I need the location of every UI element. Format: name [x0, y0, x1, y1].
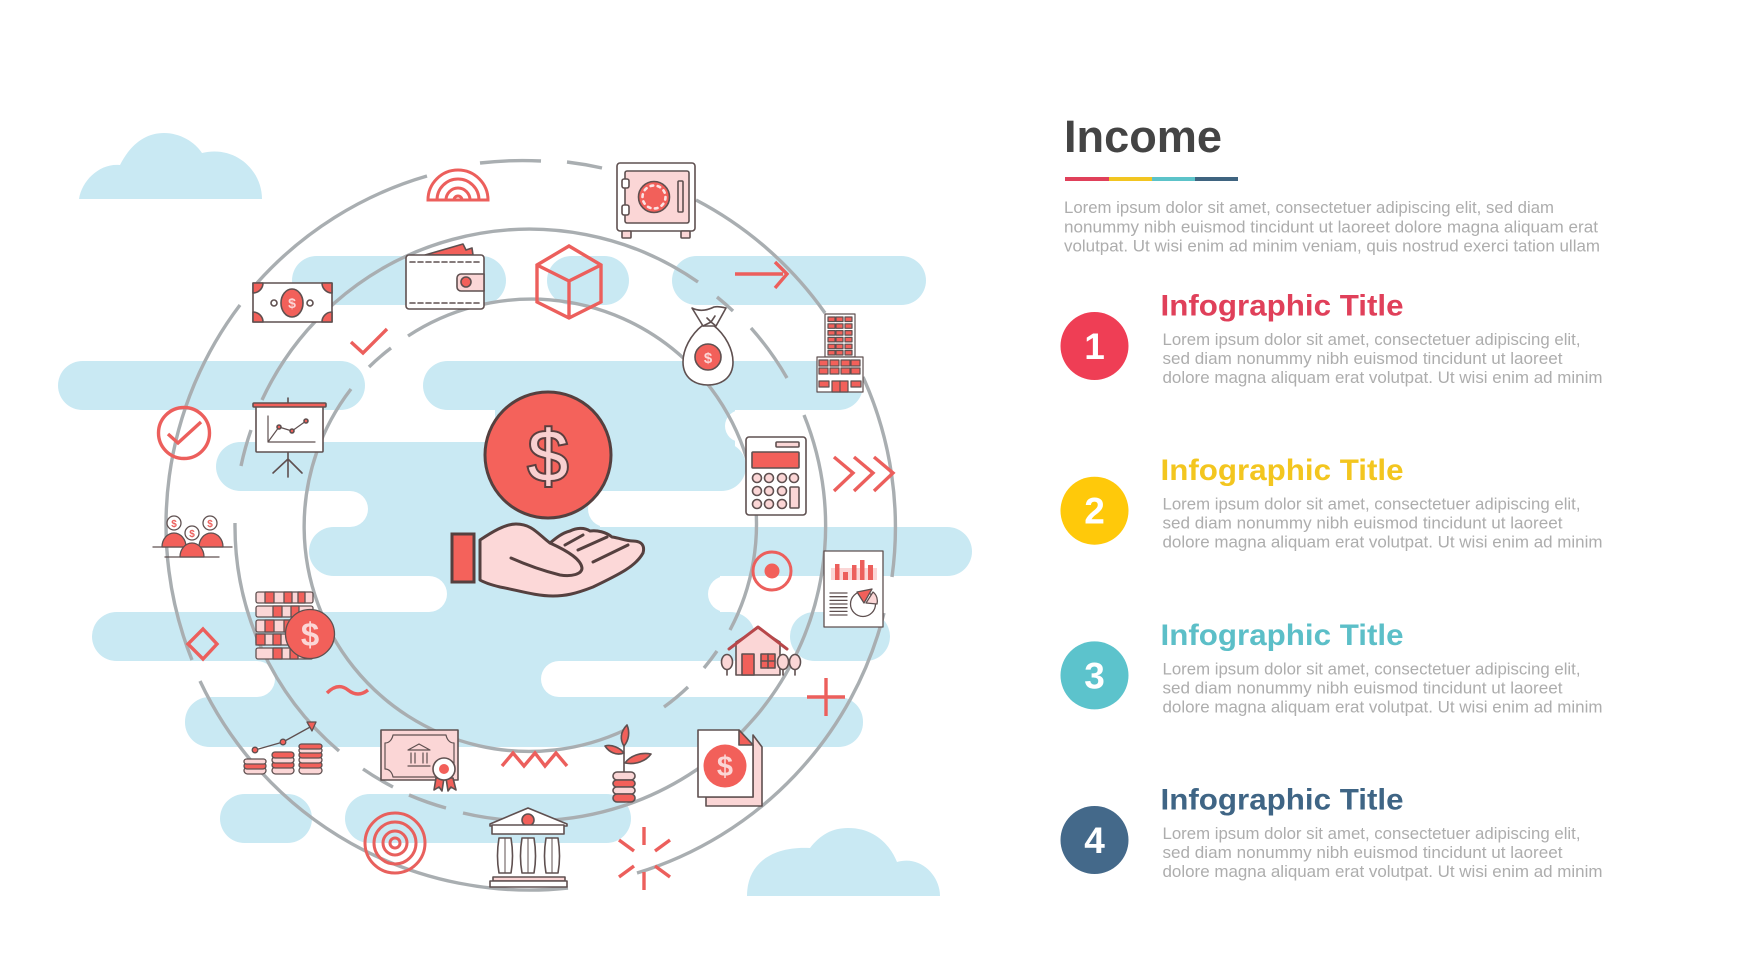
icon: right arrow	[735, 262, 787, 288]
background: clouds and blue bands	[58, 133, 1008, 896]
item 2 text	[1162, 495, 1602, 552]
item 3 text	[1162, 659, 1602, 716]
item 1	[1060, 290, 1602, 387]
intro paragraph: Lorem ipsum dolor sit amet, consectetuer adipiscing elit, sed diam	[1064, 198, 1554, 217]
item 2 text: Lorem ipsum dolor sit amet, consectetuer adipiscing elit,	[1162, 495, 1580, 514]
icon: wallet	[406, 244, 484, 309]
central icon: dollar coin over open hand	[452, 392, 644, 596]
item 2 text: dolore magna aliquam erat volutpat. Ut wisi enim ad minim	[1162, 533, 1602, 552]
heading underline in four colours	[1065, 177, 1238, 181]
intro paragraph: nonummy nibh euismod tincidunt ut laoreet dolore magna aliquam erat	[1064, 218, 1598, 236]
item 4 title: Infographic Title	[1160, 784, 1404, 816]
badge 2	[1060, 477, 1128, 545]
badge 3	[1060, 641, 1128, 709]
icon: presentation board	[253, 398, 326, 477]
number 2: 2	[1084, 491, 1105, 532]
icon: stacked coins with dollar	[256, 592, 334, 659]
icon: group of people with coins: $	[189, 529, 195, 540]
icon: plus sign	[807, 678, 845, 716]
icon: group of people with coins	[153, 516, 232, 557]
number 3: 3	[1084, 655, 1105, 696]
item 1 text	[1162, 330, 1602, 387]
icon: dollar document: $	[717, 751, 733, 783]
item 4 text	[1162, 824, 1602, 881]
item 3 text: dolore magna aliquam erat volutpat. Ut wisi enim ad minim	[1162, 697, 1602, 716]
icon: money bag: $	[704, 350, 713, 367]
item 2 text: sed diam nonummy nibh euismod tincidunt ut laoreet	[1162, 514, 1563, 533]
item 1 text: dolore magna aliquam erat volutpat. Ut wisi enim ad minim	[1162, 368, 1602, 387]
icon: banknote	[253, 283, 332, 322]
icon: banknote: $	[288, 295, 296, 311]
icon: rainbow arcs	[428, 170, 488, 200]
icon: report with charts	[824, 551, 883, 627]
item 4 text: dolore magna aliquam erat volutpat. Ut wisi enim ad minim	[1162, 862, 1602, 881]
icon: safe	[617, 163, 695, 238]
item 2 title: Infographic Title	[1160, 454, 1404, 487]
item 3	[1060, 619, 1602, 716]
icon: small check mark	[351, 329, 387, 353]
heading: Income: Income	[1064, 111, 1222, 162]
icon: money bag	[683, 307, 733, 385]
icon: bank certificate with seal	[381, 730, 458, 791]
item 1 text: sed diam nonummy nibh euismod tincidunt ut laoreet	[1162, 349, 1563, 368]
item 2	[1060, 454, 1602, 552]
intro paragraph	[1064, 198, 1600, 256]
badge 4	[1060, 806, 1128, 874]
icon: group of people with coins: $	[207, 519, 213, 530]
item 4 text: sed diam nonummy nibh euismod tincidunt ut laoreet	[1162, 843, 1563, 862]
icon: group of people with coins: $	[171, 519, 177, 530]
number 1: 1	[1084, 326, 1105, 367]
icon: zigzag line	[502, 753, 567, 766]
icon: target dot	[753, 552, 791, 590]
icon: growing coin stacks	[244, 722, 322, 774]
icon: bullseye target	[365, 813, 425, 873]
item 3 text: sed diam nonummy nibh euismod tincidunt ut laoreet	[1162, 678, 1563, 697]
badge 1	[1060, 312, 1128, 380]
item 4	[1060, 784, 1602, 881]
icon: calculator	[746, 437, 806, 515]
icon: spark burst	[619, 827, 670, 890]
icon: seedling on coins	[605, 725, 651, 802]
item 1 text: Lorem ipsum dolor sit amet, consectetuer adipiscing elit,	[1162, 330, 1580, 349]
icon: diamond outline	[188, 629, 217, 659]
intro paragraph: volutpat. Ut wisi enim ad minim veniam, quis nostrud exerci tation ullam	[1064, 236, 1600, 256]
icon: stacked coins with dollar: $	[301, 616, 319, 653]
item 1 title: Infographic Title	[1160, 290, 1404, 322]
icon: tilde wave	[327, 687, 368, 694]
icon: cube outline	[537, 246, 601, 318]
number 4: 4	[1084, 820, 1105, 861]
icon: house with trees	[722, 627, 800, 675]
item 3 title: Infographic Title	[1160, 619, 1404, 652]
item 4 text: Lorem ipsum dolor sit amet, consectetuer adipiscing elit,	[1162, 824, 1580, 843]
icon: check in circle	[158, 408, 210, 458]
icon: triple chevrons	[834, 457, 893, 491]
item 3 text: Lorem ipsum dolor sit amet, consectetuer adipiscing elit,	[1162, 659, 1580, 678]
icon: bank building	[490, 808, 567, 887]
dashed concentric rings	[166, 161, 895, 890]
central icon: dollar coin over open hand: $	[528, 417, 568, 497]
icon: office building	[817, 314, 863, 392]
icon: dollar document	[698, 730, 762, 806]
